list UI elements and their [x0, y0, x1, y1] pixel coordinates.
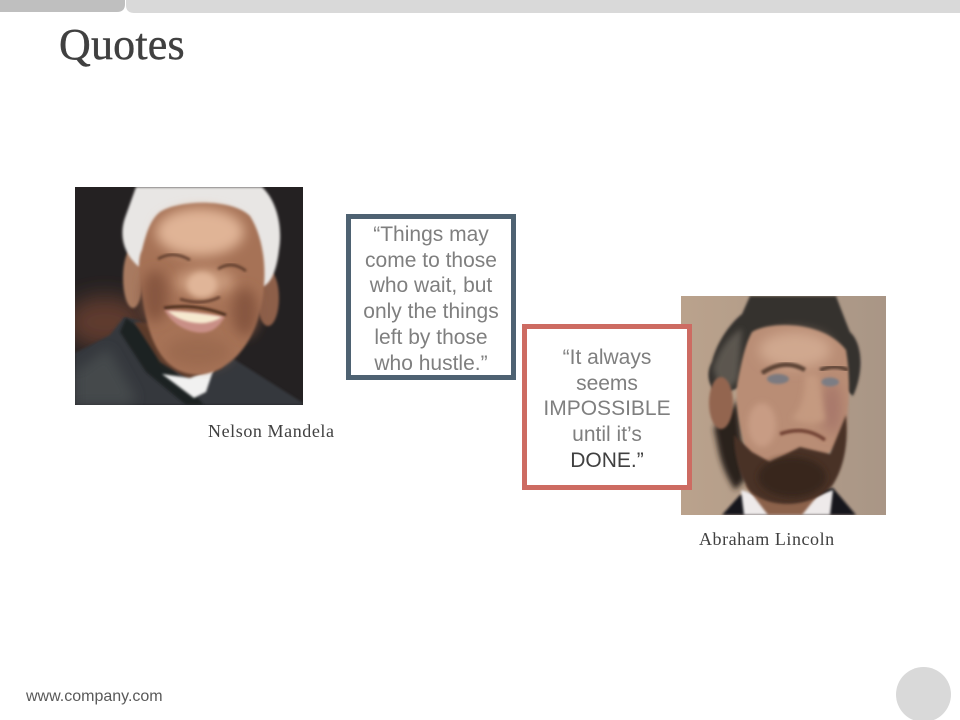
quote box: Mandela [346, 214, 516, 380]
portrait: Abraham Lincoln [681, 296, 886, 515]
quote box: Lincoln: DONE.” [570, 449, 644, 472]
name: Nelson Mandela: Nelson Mandela [208, 421, 335, 441]
quote box: Lincoln [522, 324, 692, 490]
smile [164, 309, 225, 333]
neck and collar [134, 322, 232, 380]
quote box: Lincoln: IMPOSSIBLE [543, 397, 671, 420]
face [737, 325, 849, 480]
mouth [780, 431, 825, 440]
quote box: Mandela: “Things may [373, 223, 489, 246]
quote box: Mandela: only the things [363, 300, 499, 323]
ear [709, 377, 733, 429]
beard [734, 415, 847, 504]
quote box: Mandela: left by those [374, 326, 488, 349]
top progress bar [0, 0, 960, 13]
title: Quotes [59, 20, 185, 69]
portrait: Nelson Mandela [75, 187, 303, 405]
quote box: Mandela: come to those [365, 249, 497, 272]
quote box: Mandela: who hustle.” [374, 352, 488, 375]
suit and shirt [722, 488, 856, 515]
hair [122, 187, 280, 286]
eyes and nose [158, 255, 190, 260]
quote box: Lincoln: “It always [563, 346, 651, 369]
page number circle [896, 667, 951, 720]
neck [745, 480, 830, 515]
ears [123, 248, 143, 308]
hair [708, 296, 861, 396]
face [139, 203, 264, 375]
name: Abraham Lincoln: Abraham Lincoln [699, 529, 835, 549]
quote box: Lincoln: seems [576, 372, 638, 395]
brows and eyes [762, 365, 805, 373]
shirt [75, 317, 303, 405]
quote box: Lincoln: until it’s [572, 423, 642, 446]
quote box: Mandela: who wait, but [370, 274, 492, 297]
footer url: www.company.com [26, 688, 163, 705]
